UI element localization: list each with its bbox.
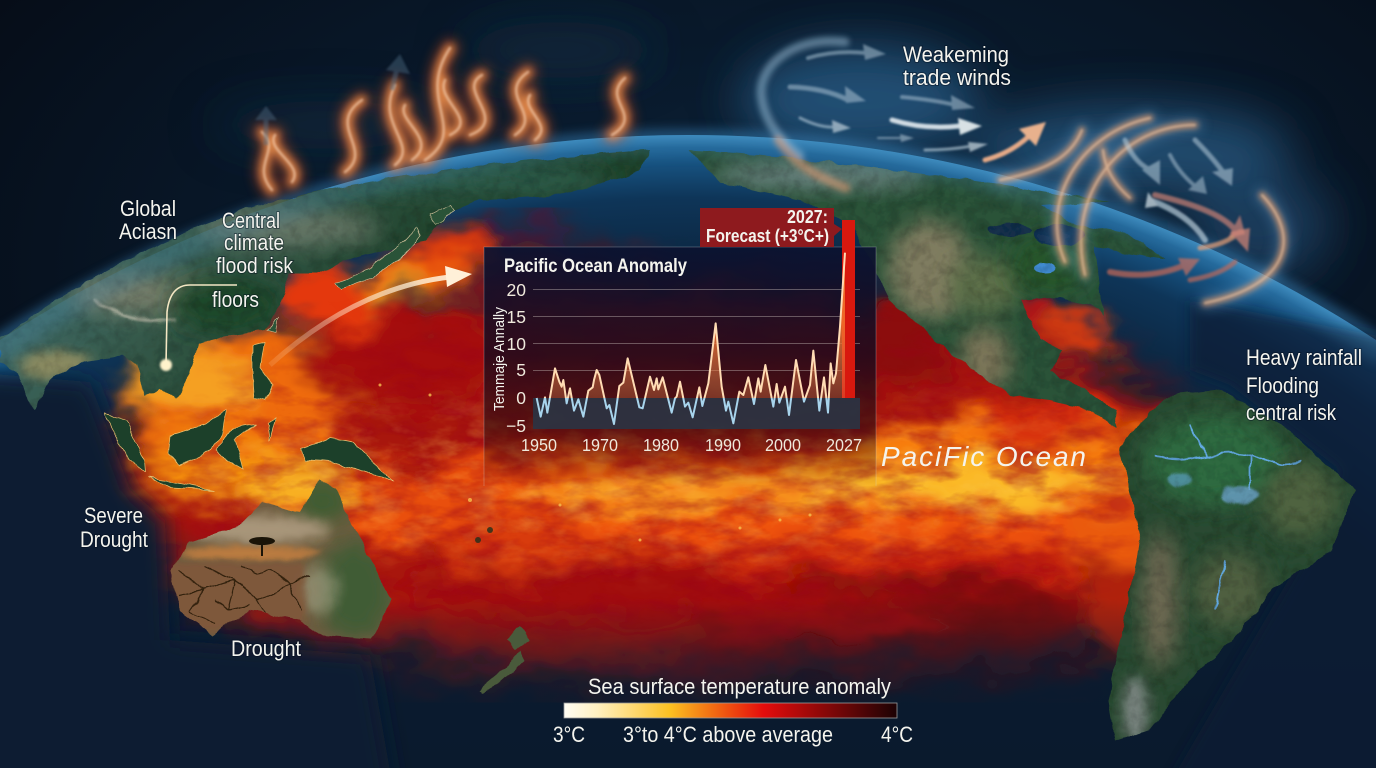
x axis years: 1980 (643, 435, 679, 455)
y axis values: 15 (507, 307, 526, 327)
x axis years: 1990 (705, 435, 741, 455)
label: severe drought: Drought (80, 527, 148, 552)
swirling dark filaments (148, 362, 1138, 618)
white curved arrow toward chart (270, 266, 472, 365)
land: South America (1100, 385, 1360, 745)
chart title: Pacific Ocean Anomaly (504, 255, 687, 277)
scale labels: 3°C (553, 722, 585, 747)
label: heavy rainfall: central risk (1246, 400, 1337, 425)
forecast bar (842, 220, 855, 398)
label: severe drought (80, 503, 148, 552)
land: Australia (165, 475, 393, 640)
land: New Zealand (478, 625, 530, 692)
x axis years (521, 435, 862, 455)
left wind ring (761, 41, 846, 188)
callout: 2027 forecast: Forecast (+3°C+) (706, 226, 829, 246)
callout: 2027 forecast: 2027: (787, 207, 828, 227)
x axis years: 2000 (765, 435, 801, 455)
sea surface temperature field (100, 230, 1210, 700)
weakening trade wind arrows (790, 44, 1233, 240)
scattered Pacific islands (378, 384, 812, 543)
y axis values (506, 280, 526, 436)
atmosphere glow on horizon (0, 136, 1376, 346)
icon: acacia tree (249, 537, 275, 556)
y axis values: 5 (516, 360, 526, 380)
label: Global Aciasn (119, 196, 177, 244)
label: heavy rainfall: Heavy rainfall (1246, 345, 1362, 370)
land: North America (690, 150, 1170, 430)
land: Japan and nearby islands (267, 205, 455, 332)
callout: 2027 forecast (700, 207, 842, 247)
label: Global Aciasn: Global (120, 196, 176, 221)
label: heavy rainfall (1246, 345, 1362, 425)
label: severe drought: Severe (84, 503, 143, 528)
colour scale (564, 703, 897, 718)
clouds in the upper atmosphere (210, 22, 1330, 280)
Atlantic cool water (1160, 300, 1376, 768)
chart panel: Pacific Ocean Anomaly (484, 220, 876, 487)
land: Asia (0, 150, 660, 420)
label: Central climate flood risk floors: floors (212, 287, 259, 312)
y axis values: 0 (516, 388, 526, 408)
scale labels: 4°C (881, 722, 913, 747)
anomaly line (537, 253, 845, 424)
x axis years: 2027 (826, 435, 862, 455)
label: Central climate flood risk floors: Central (222, 208, 280, 233)
atmospheric haze over the limb (0, 140, 1376, 352)
x axis years: 1950 (521, 435, 557, 455)
label: weakening trade winds (903, 42, 1011, 90)
label: heavy rainfall: Flooding (1246, 373, 1319, 398)
gridlines (533, 290, 860, 370)
y axis values: 20 (507, 280, 526, 300)
label: drought: Drought (231, 636, 301, 661)
label: weakening trade winds: trade winds (903, 65, 1011, 90)
label: Global Aciasn: Aciasn (119, 219, 177, 244)
swirling bright filaments (198, 392, 1124, 582)
scale labels: 3°to 4°C above average (623, 722, 833, 747)
ocean label: PaciFic Ocean (881, 441, 1086, 472)
panel edges (484, 247, 876, 486)
legend: sea surface temperature anomaly (553, 674, 913, 747)
swirling wind bands (1000, 118, 1284, 303)
y axis values: −5 (506, 416, 526, 436)
scale labels (553, 722, 913, 747)
leader line with glowing point (160, 285, 237, 371)
legend title: Sea surface temperature anomaly (588, 674, 891, 699)
x axis years: 1970 (582, 435, 618, 455)
label: Central climate flood risk floors: climate (224, 230, 284, 255)
warm returning wind arrows (985, 122, 1250, 280)
rising heat flames (262, 48, 625, 190)
panel background (484, 247, 876, 487)
y axis title: Temmaje Annally (491, 307, 508, 411)
y axis values: 10 (507, 334, 526, 354)
fade of hot water toward the bottom (0, 600, 1376, 768)
negative band (533, 398, 860, 429)
label: weakening trade winds: Weakeming (903, 42, 1009, 67)
Indian Ocean and Southern Ocean cool water (0, 372, 395, 768)
land: Indonesia, Philippines and New Guinea (105, 342, 395, 490)
faint heat arrows above flames (255, 54, 410, 145)
label: Central climate flood risk floors: flood risk (216, 253, 294, 278)
label: Central climate flood risk floors (212, 208, 294, 312)
